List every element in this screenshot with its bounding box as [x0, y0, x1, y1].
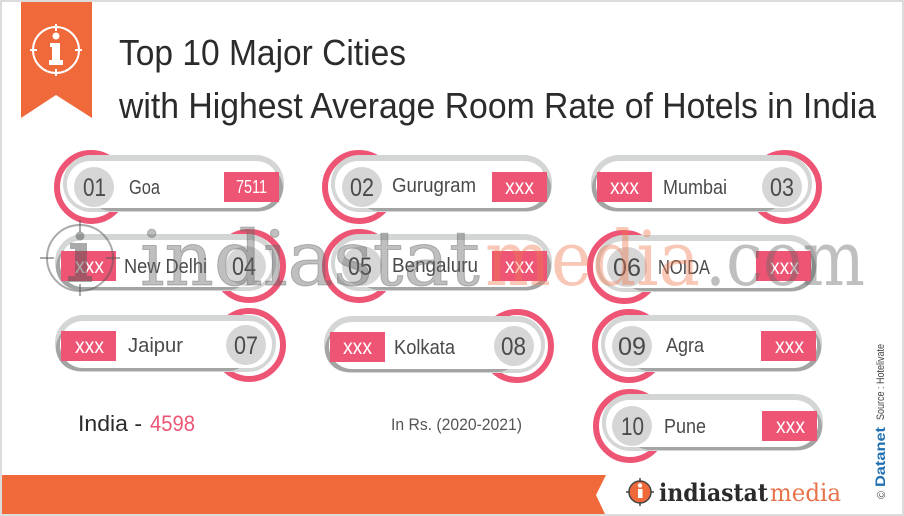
watermark: media — [485, 214, 700, 303]
item 04 New Delhi — [55, 232, 283, 300]
item 09 Agra: xxx — [775, 335, 804, 358]
item 03 Mumbai — [591, 153, 819, 221]
item 08 Kolkata: 08 — [501, 333, 526, 361]
item 09 Agra — [595, 312, 822, 380]
item 06 NOIDA: NOIDA — [658, 257, 711, 279]
watermark: .com — [705, 214, 865, 303]
item 10 Pune: xxx — [776, 415, 805, 438]
source credit: Source : Hotelivate — [875, 344, 887, 420]
item 05 Bengaluru: Bengaluru — [392, 255, 478, 277]
national average: India - — [78, 411, 142, 436]
item 02 Gurugram: 02 — [350, 174, 374, 202]
unit and year note: In Rs. (2020-2021) — [391, 415, 522, 434]
title: with Highest Average Room Rate of Hotels in India — [118, 85, 877, 126]
item 08 Kolkata: Kolkata — [394, 337, 456, 359]
item 01 Goa — [57, 153, 284, 221]
source credit: © — [876, 491, 888, 499]
item 03 Mumbai: xxx — [610, 176, 639, 199]
item 04 New Delhi: 04 — [232, 253, 256, 281]
watermark: indiastat — [140, 214, 480, 303]
item 10 Pune — [596, 392, 823, 460]
item 08 Kolkata: xxx — [343, 336, 372, 359]
item 04 New Delhi: New Delhi — [124, 256, 207, 278]
item 06 NOIDA: xxx — [770, 256, 799, 279]
footer logo — [626, 478, 841, 507]
national average: 4598 — [150, 411, 195, 436]
item 09 Agra: 09 — [618, 333, 646, 361]
item 09 Agra: Agra — [666, 335, 705, 357]
title — [118, 32, 877, 126]
item 06 NOIDA — [590, 233, 817, 301]
item 10 Pune: 10 — [621, 413, 644, 441]
footer logo: indiastat — [659, 478, 768, 507]
item 04 New Delhi: xxx — [75, 255, 104, 278]
item 07 Jaipur: Jaipur — [128, 335, 183, 357]
watermark — [40, 214, 865, 303]
item 10 Pune: Pune — [664, 416, 706, 438]
item 07 Jaipur: 07 — [234, 332, 258, 360]
footer logo: media — [770, 479, 841, 507]
item 03 Mumbai: 03 — [770, 174, 794, 202]
footer band — [2, 475, 606, 514]
item 07 Jaipur — [55, 311, 283, 379]
item 08 Kolkata — [324, 312, 551, 380]
item 06 NOIDA: 06 — [613, 254, 641, 282]
source credit: Datanet — [872, 427, 888, 487]
item 02 Gurugram: Gurugram — [392, 175, 476, 197]
item 05 Bengaluru — [325, 232, 552, 300]
item 02 Gurugram — [325, 153, 552, 221]
item 03 Mumbai: Mumbai — [663, 177, 727, 199]
title: Top 10 Major Cities — [119, 32, 406, 73]
item 05 Bengaluru: xxx — [505, 255, 534, 278]
source credit — [872, 344, 888, 499]
national average — [78, 411, 195, 436]
item 07 Jaipur: xxx — [75, 335, 104, 358]
ribbon with info icon — [21, 2, 92, 118]
item 01 Goa: 01 — [83, 174, 106, 202]
item 01 Goa: Goa — [129, 177, 161, 199]
item 01 Goa: 7511 — [236, 177, 267, 197]
item 05 Bengaluru: 05 — [348, 253, 372, 281]
item 02 Gurugram: xxx — [505, 176, 534, 199]
